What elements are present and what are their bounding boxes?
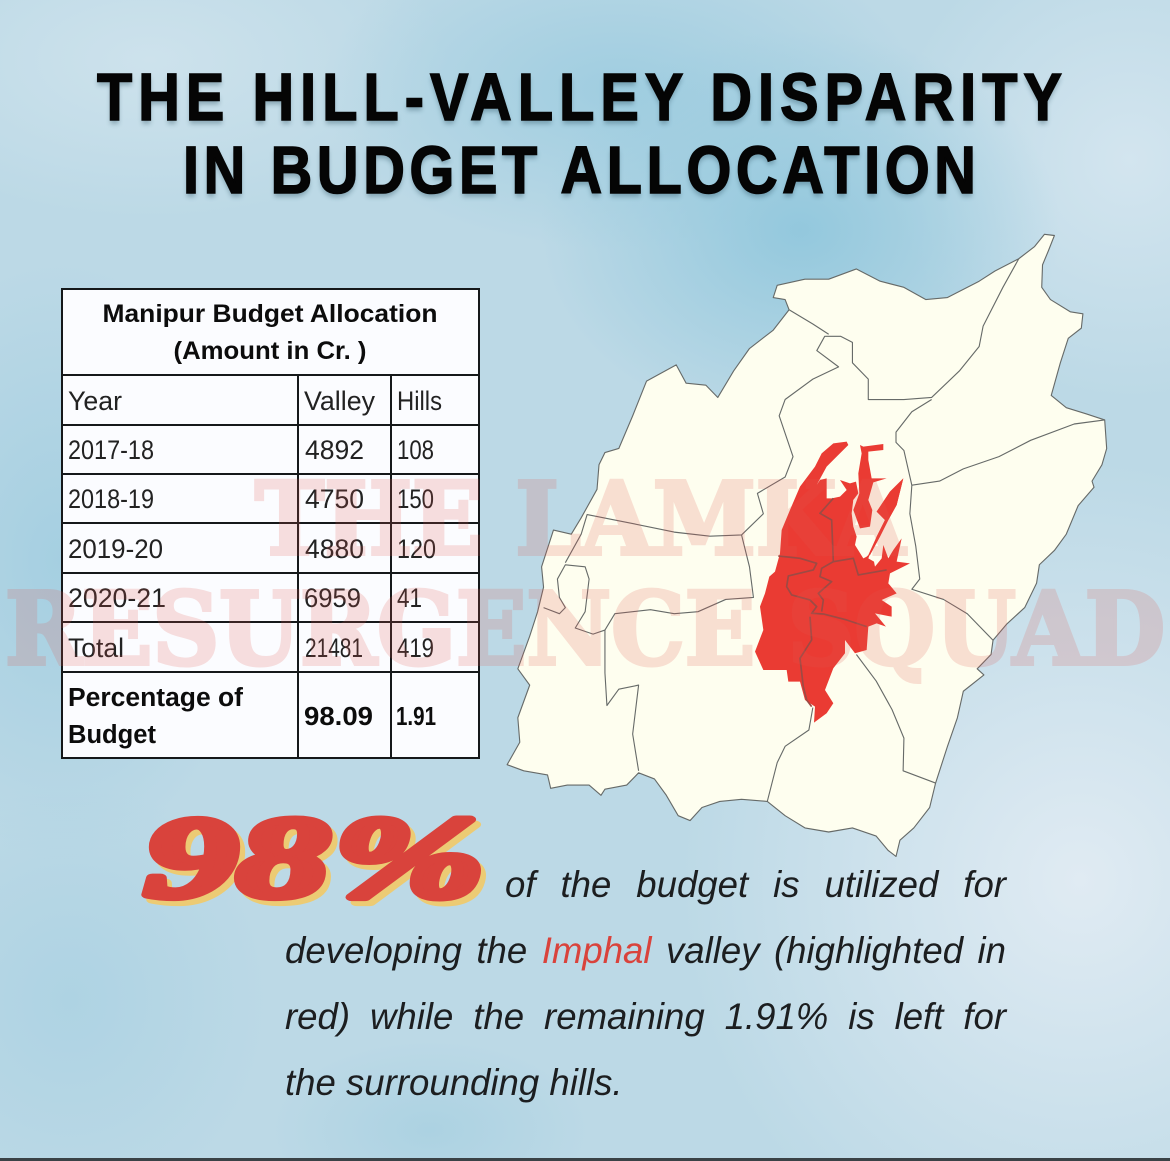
map of Manipur xyxy=(507,234,1107,856)
table rows: 21481 xyxy=(305,633,363,663)
table rows: Hills xyxy=(397,386,442,416)
table percentage row: 1.91 xyxy=(396,703,436,731)
table rows: 2020-21 xyxy=(68,583,166,613)
title: IN BUDGET ALLOCATION xyxy=(183,133,976,208)
table percentage row: 98.09 xyxy=(304,703,373,731)
title: THE HILL-VALLEY DISPARITY xyxy=(97,60,1062,135)
table rows: Year xyxy=(68,386,122,416)
watermark: THE LAMKA xyxy=(255,460,906,578)
table rows: Total xyxy=(68,633,124,663)
table rows: 4880 xyxy=(305,534,364,564)
map: Imphal valley highlighted in red xyxy=(755,442,910,723)
table rows: 120 xyxy=(397,534,436,564)
big number: 98%: % xyxy=(339,799,489,926)
table rows: 2017-18 xyxy=(68,435,154,465)
table rows: 2019-20 xyxy=(68,534,163,564)
table percentage row: Percentage of xyxy=(68,684,244,712)
table percentage row: Budget xyxy=(68,721,156,749)
table heading xyxy=(102,300,437,365)
title: THE HILL-VALLEY DISPARITY xyxy=(97,64,1062,139)
bottom edge xyxy=(0,1158,1170,1161)
big number: 98% xyxy=(145,794,489,926)
table rows xyxy=(68,386,442,663)
table rows: 41 xyxy=(397,583,422,613)
table heading: (Amount in Cr. ) xyxy=(174,337,366,365)
watermark xyxy=(5,460,1165,688)
big number: 98%: % xyxy=(334,794,484,921)
table rows: 419 xyxy=(397,633,434,663)
table rows: 150 xyxy=(397,484,434,514)
table rows: 4892 xyxy=(305,435,364,465)
table rows: 108 xyxy=(397,435,434,465)
table rows: 2018-19 xyxy=(68,484,154,514)
title: IN BUDGET ALLOCATION xyxy=(183,137,976,212)
body text: the surrounding hills. xyxy=(285,1062,623,1103)
table rows: 4750 xyxy=(305,484,364,514)
body text: of the budget is utilized for xyxy=(505,864,1006,905)
title xyxy=(97,60,1062,212)
map: districts xyxy=(507,234,1107,856)
table rows: 6959 xyxy=(304,583,361,613)
body text: red) while the remaining 1.91% is left for xyxy=(285,996,1006,1037)
big number: 98%: 98 xyxy=(145,794,329,921)
table: Manipur budget allocation xyxy=(62,289,479,758)
table heading: Manipur Budget Allocation xyxy=(102,300,437,328)
big number: 98%: 98 xyxy=(150,799,334,926)
table percentage row xyxy=(68,684,436,749)
table rows: Valley xyxy=(304,386,376,416)
body text: developing the Imphal valley (highlighted in xyxy=(285,930,1006,971)
